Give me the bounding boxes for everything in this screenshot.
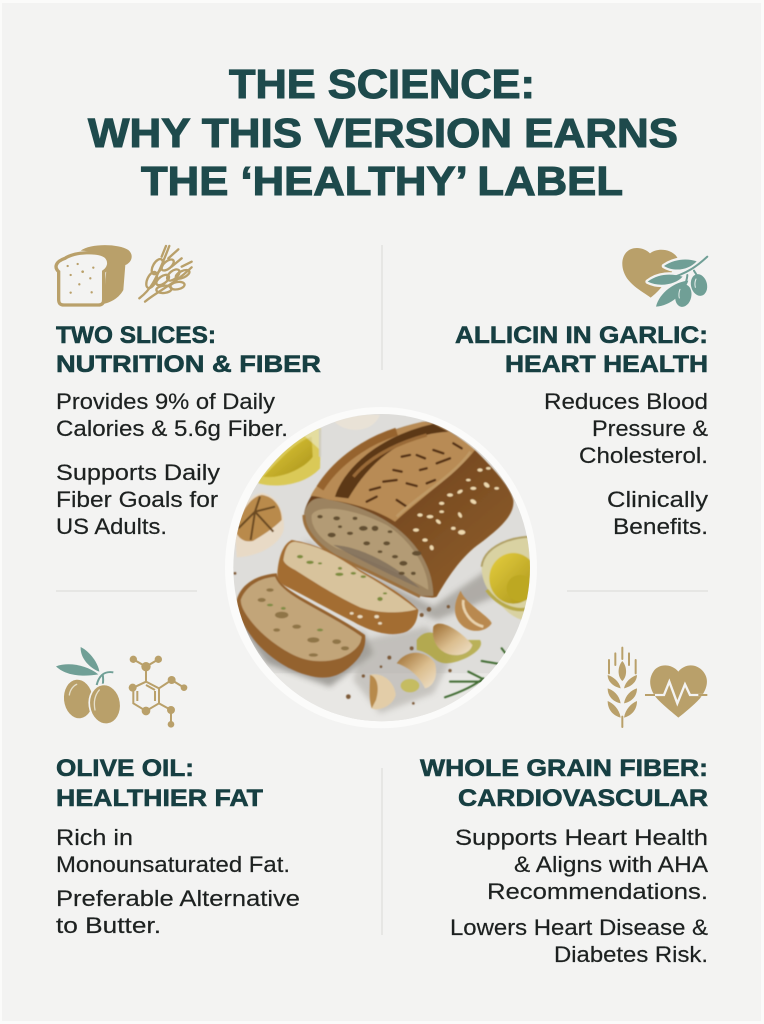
loaf cut face [304, 498, 433, 596]
title [88, 61, 678, 204]
oil drips [417, 632, 481, 663]
heading: allicin in garlic [455, 322, 708, 378]
title: WHY THIS VERSION EARNS [88, 110, 678, 156]
text: daily calories and fiber [56, 389, 288, 539]
text: daily calories and fiber: US Adults. [56, 514, 167, 539]
rosemary [445, 648, 506, 697]
text: heart disease and diabetes risk: Lowers Heart Disease & [450, 915, 708, 940]
text: blood pressure and cholesterol: Reduces Blood [544, 389, 708, 414]
text: heart disease and diabetes risk: Recommendations. [487, 879, 708, 904]
text: monounsaturated fat: to Butter. [56, 913, 161, 938]
middle slice [277, 540, 418, 634]
title: THE SCIENCE: [229, 61, 535, 107]
heading: olive oil: OLIVE OIL: [56, 755, 194, 782]
heading: allicin in garlic: ALLICIN IN GARLIC: [455, 322, 708, 349]
text: heart disease and diabetes risk: Diabetes Risk. [554, 942, 708, 967]
text: monounsaturated fat: Preferable Alternative [56, 886, 300, 911]
text: heart disease and diabetes risk: & Aligns with AHA [514, 852, 708, 877]
heading: whole grain fiber: WHOLE GRAIN FIBER: [420, 755, 708, 782]
top bowl [336, 415, 379, 430]
text: monounsaturated fat: Rich in [56, 825, 133, 850]
heading: whole grain fiber: CARDIOVASCULAR [458, 785, 708, 812]
text: heart disease and diabetes risk: Supports Heart Health [455, 825, 708, 850]
garlic head [235, 493, 284, 557]
oil glass [258, 428, 321, 485]
text: heart disease and diabetes risk [450, 825, 708, 967]
panel: whole grain fiber [420, 648, 708, 967]
icon: olives and molecule [56, 647, 187, 728]
text: blood pressure and cholesterol: Clinically [607, 487, 708, 512]
loaf seeds [413, 467, 499, 551]
text: blood pressure and cholesterol: Cholesterol. [579, 443, 708, 468]
text: blood pressure and cholesterol: Benefits. [613, 514, 708, 539]
garlic cloves [455, 591, 492, 631]
loaf top [311, 422, 475, 522]
infographic page [54, 69, 708, 962]
title: THE ‘HEALTHY’ LABEL [141, 158, 623, 204]
photo: sliced whole grain loaf with garlic and olive oil [234, 414, 530, 722]
text: monounsaturated fat [56, 825, 300, 938]
text: blood pressure and cholesterol: Pressure & [592, 416, 708, 441]
text: blood pressure and cholesterol [544, 389, 708, 539]
icon: bread and wheat [56, 245, 192, 305]
icon: wheat and heartbeat [608, 648, 707, 727]
heading: two slices [56, 322, 321, 378]
loaf base crust [304, 422, 513, 598]
panel: olive oil [56, 647, 300, 938]
panel: allicin in garlic [455, 248, 709, 539]
text: daily calories and fiber: Supports Daily [56, 460, 220, 485]
panel: two slices [56, 245, 321, 539]
text: daily calories and fiber: Provides 9% of Daily [56, 389, 275, 414]
glass bowl of olive oil [482, 537, 533, 621]
heading: whole grain fiber [420, 755, 708, 812]
heading: two slices: NUTRITION & FIBER [56, 351, 321, 378]
bottom slice [237, 573, 365, 678]
heading: olive oil [56, 755, 263, 812]
heading: allicin in garlic: HEART HEALTH [505, 351, 708, 378]
icon: heart and olive branch [622, 248, 709, 308]
text: daily calories and fiber: Fiber Goals for [56, 487, 218, 512]
heading: olive oil: HEALTHIER FAT [56, 785, 263, 812]
crumbs [234, 572, 452, 705]
heading: two slices: TWO SLICES: [56, 322, 216, 349]
text: daily calories and fiber: Calories & 5.6g Fiber. [56, 416, 288, 441]
text: monounsaturated fat: Monounsaturated Fat. [56, 852, 290, 877]
